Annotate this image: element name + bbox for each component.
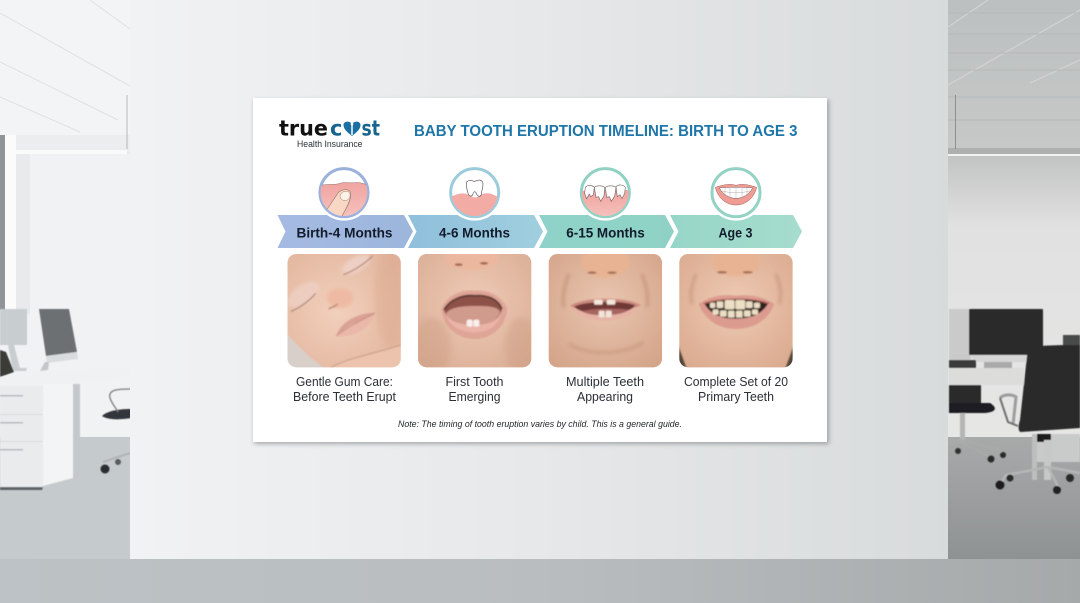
logo: truecost Health Insurance: true (279, 116, 328, 140)
left desk with monitors (0, 309, 131, 490)
caption: Age 3 (684, 375, 788, 404)
right desk with monitors and chairs (949, 309, 1080, 494)
photo: first tooth (418, 254, 532, 368)
right room (948, 0, 1080, 150)
caption: Age 3: Complete Set of 20 (684, 375, 788, 389)
gallery wall (130, 0, 948, 559)
caption: 6-15 Months: Multiple Teeth (566, 375, 644, 389)
timeline arrows (278, 215, 802, 248)
title: BABY TOOTH ERUPTION TIMELINE: BIRTH TO AGE 3 (414, 123, 798, 140)
caption: 4-6 Months: First Tooth (446, 375, 504, 389)
photo: complete teeth (679, 254, 793, 368)
caption: 4-6 Months (446, 375, 504, 404)
icon: finger on gums (318, 167, 370, 221)
poster panel (253, 98, 827, 442)
icon: first tooth (449, 167, 500, 221)
caption: 6-15 Months: Appearing (577, 390, 633, 404)
arrow: Birth-4 Months (278, 215, 413, 248)
logo: truecost Health Insurance: Health Insurance (297, 139, 363, 149)
logo: truecost Health Insurance: st (362, 116, 380, 140)
photo: sleeping baby (288, 254, 401, 368)
caption: Birth-4 Months: Gentle Gum Care: (296, 375, 393, 389)
logo: truecost Health Insurance: c (330, 116, 342, 140)
arrow: 4-6 Months: 4-6 Months (439, 224, 510, 240)
arrow: Age 3 (670, 215, 802, 248)
caption: Birth-4 Months: Before Teeth Erupt (293, 390, 397, 404)
poster shadow (254, 100, 829, 444)
arrow: 6-15 Months (539, 215, 674, 248)
arrow: Age 3: Age 3 (718, 224, 753, 240)
arrow: 4-6 Months (408, 215, 543, 248)
photo: multiple teeth (548, 254, 662, 368)
arrow: Birth-4 Months: Birth-4 Months (296, 224, 393, 240)
logo: truecost Health Insurance (279, 116, 380, 149)
icon: full smile (708, 165, 764, 221)
arrow: 6-15 Months: 6-15 Months (566, 224, 645, 240)
caption: Age 3: Primary Teeth (698, 390, 774, 404)
note: Note: The timing of tooth eruption varies by child. This is a general guide. (398, 419, 682, 430)
caption: Birth-4 Months (293, 375, 397, 404)
caption: 6-15 Months (566, 375, 644, 404)
icon: multiple teeth (580, 167, 631, 221)
icon: logo heart (344, 122, 360, 136)
floor strip (0, 559, 1080, 603)
caption: 4-6 Months: Emerging (448, 390, 501, 404)
